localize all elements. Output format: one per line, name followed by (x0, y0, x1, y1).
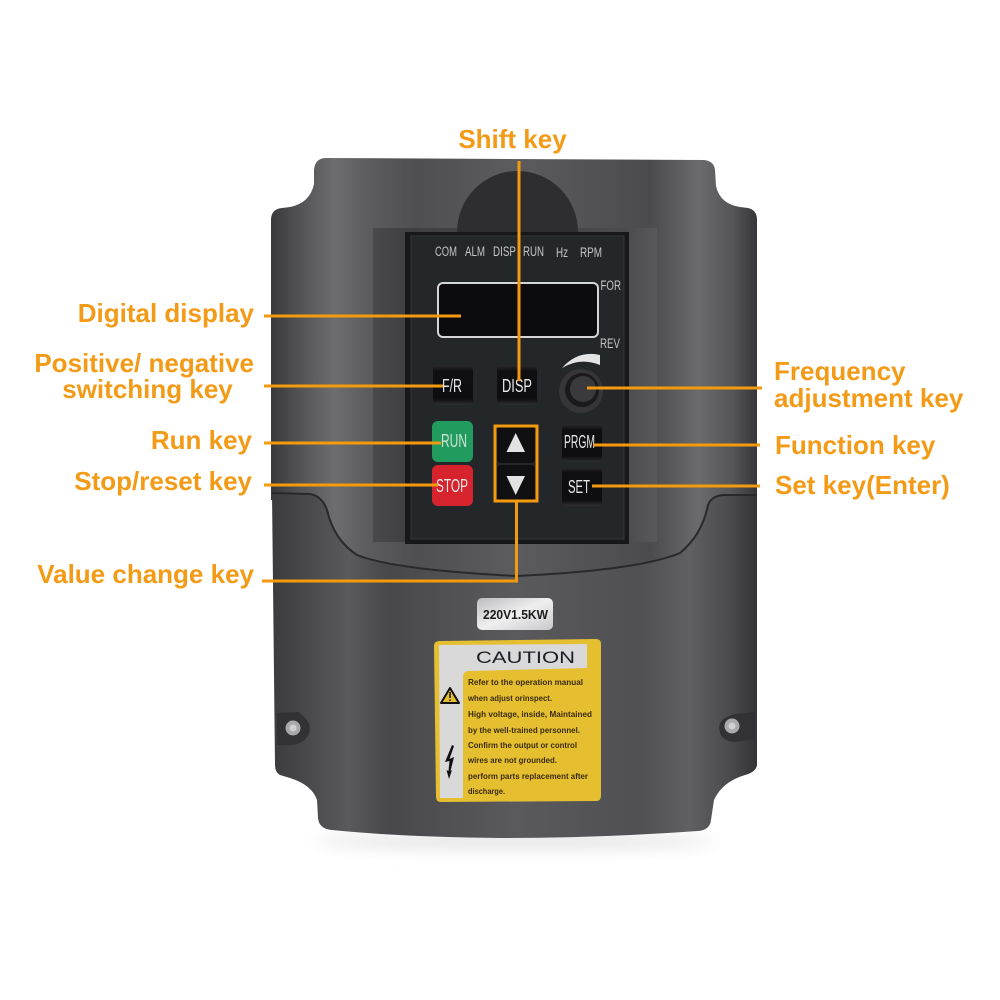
indicator labels: RPM (580, 245, 602, 260)
indicator labels: FOR (600, 278, 621, 293)
caution sticker (434, 639, 601, 802)
rating plate: 220V1.5KW (483, 607, 549, 622)
knob arc (562, 354, 600, 368)
RUN key (432, 421, 473, 462)
up key (497, 427, 535, 463)
lower cover (272, 493, 757, 838)
label: function key: Function key (775, 430, 936, 460)
caution heading: CAUTION (476, 649, 575, 667)
left screw (277, 712, 310, 745)
warning text: when adjust orinspect. (467, 694, 552, 703)
STOP key (432, 465, 473, 506)
frequency knob (559, 369, 603, 413)
indicator labels (435, 244, 621, 351)
PRGM key: PRGM (564, 432, 595, 452)
leader lines (262, 161, 762, 581)
panel face (405, 232, 629, 544)
digital display (438, 283, 598, 337)
warning text: wires are not grounded. (467, 756, 557, 765)
PRGM key (562, 424, 602, 462)
label: positive/negative switching key (34, 348, 254, 404)
indicator labels: ALM (465, 244, 485, 259)
indicator labels: Hz (556, 245, 568, 260)
DISP key (497, 365, 537, 405)
warning text: Confirm the output or control (468, 741, 577, 750)
rating plate (477, 598, 553, 630)
F/R key (433, 365, 473, 405)
warning text: by the well-trained personnel. (468, 726, 580, 735)
label: shift key: Shift key (458, 124, 567, 154)
control panel (405, 232, 629, 544)
label: positive/negative switching key: switching key (62, 374, 233, 404)
indicator labels: DISP (493, 244, 516, 259)
SET key: SET (568, 477, 590, 497)
high voltage bolt icon (445, 745, 454, 779)
upper housing (271, 158, 757, 575)
label: frequency adjustment key: Frequency (774, 356, 906, 386)
label: digital display: Digital display (78, 298, 255, 328)
warning text: High voltage, inside, Maintained (468, 710, 592, 719)
warning text (467, 678, 592, 796)
warning text: discharge. (468, 787, 505, 796)
warning text: perform parts replacement after (468, 772, 588, 781)
floor shadow (315, 834, 715, 848)
label: positive/negative switching key: Positive/ negative (34, 348, 254, 378)
label: frequency adjustment key (774, 356, 964, 413)
warning triangle icon (441, 688, 459, 703)
right screw (719, 712, 755, 742)
label: set key: Set key(Enter) (775, 470, 950, 500)
label: frequency adjustment key: adjustment key (774, 383, 964, 413)
cover seam (272, 493, 757, 576)
down key (497, 465, 535, 500)
label: stop/reset key: Stop/reset key (74, 466, 253, 496)
F/R key: F/R (442, 376, 462, 396)
STOP key: STOP (436, 476, 468, 496)
SET key (562, 467, 602, 506)
indicator labels: RUN (523, 244, 544, 259)
grey strip (439, 644, 587, 798)
panel recess (373, 228, 657, 542)
RUN key: RUN (441, 431, 467, 451)
DISP key: DISP (502, 376, 532, 396)
label: run key: Run key (151, 425, 253, 455)
label: value change key: Value change key (37, 559, 255, 589)
device: inverter body (271, 158, 757, 838)
top semicircle notch (457, 171, 578, 232)
warning text: Refer to the operation manual (468, 678, 583, 687)
indicator labels: REV (600, 336, 620, 351)
sticker base (434, 639, 601, 802)
indicator labels: COM (435, 244, 457, 259)
